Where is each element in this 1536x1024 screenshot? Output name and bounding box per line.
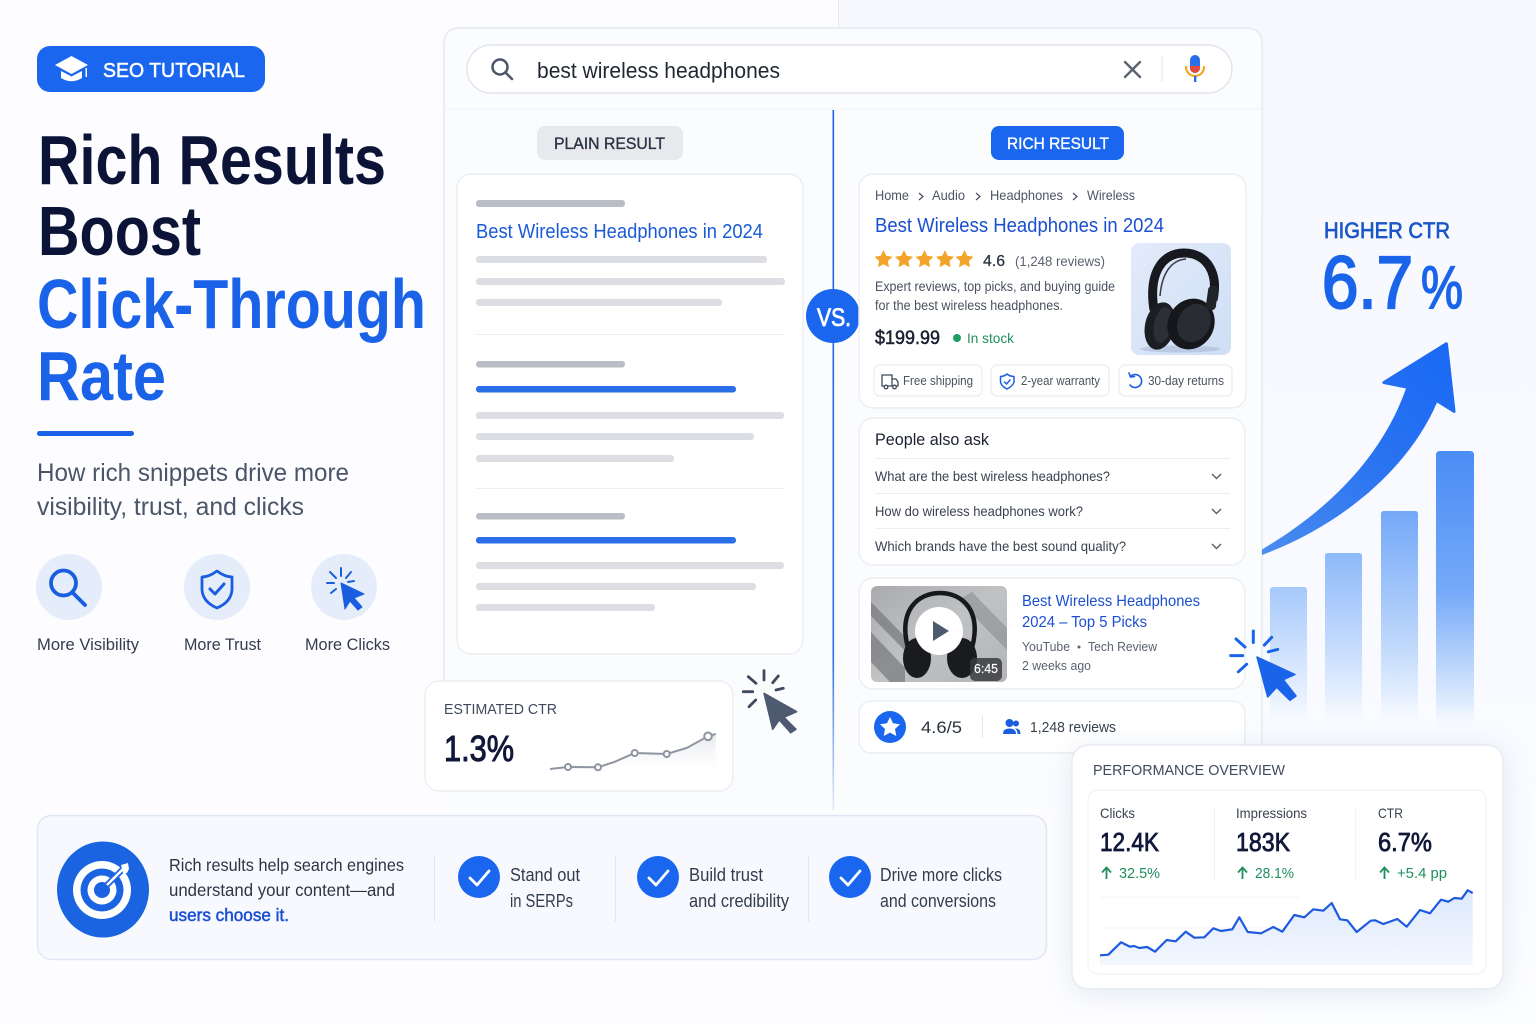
breadcrumb — [875, 187, 1135, 203]
breadcrumb: Audio — [932, 187, 965, 203]
icon: graduation cap — [55, 56, 88, 81]
metric: clicks: 32.5% — [1119, 865, 1160, 882]
metric: clicks: 12.4K — [1100, 827, 1160, 857]
check: stand out — [458, 856, 580, 911]
card: rating summary: 4.6/5 — [921, 718, 962, 737]
card: video result: Best Wireless Headphones — [1022, 593, 1200, 610]
takeaway text: understand your content—and — [169, 880, 395, 900]
metric: impressions: 28.1% — [1255, 865, 1294, 882]
card: video result: Tech Review — [1088, 639, 1158, 654]
icon: click cursor — [327, 568, 364, 610]
bar chart — [1270, 451, 1474, 730]
panel: performance overview — [1072, 745, 1503, 989]
card: estimated CTR: 1.3% — [444, 728, 514, 769]
title: Rate — [37, 337, 166, 415]
arrow: growth — [1262, 342, 1456, 555]
card: people also ask — [859, 418, 1245, 565]
metric: CTR: 6.7% — [1378, 827, 1432, 857]
card: rich product result — [859, 174, 1246, 408]
subtitle: visibility, trust, and clicks — [37, 493, 304, 521]
check: drive clicks — [829, 856, 1002, 911]
star rating — [874, 250, 974, 267]
benefit: more trust — [184, 554, 261, 654]
subtitle: How rich snippets drive more — [37, 459, 349, 487]
subtitle — [37, 459, 349, 521]
search bar — [467, 45, 1232, 93]
check: build trust — [637, 856, 789, 911]
description — [875, 279, 1115, 313]
higher CTR stat: 6.7 — [1322, 241, 1413, 324]
card: rating summary: 1,248 reviews — [1030, 719, 1116, 736]
metric: impressions: Impressions — [1236, 805, 1307, 821]
card: people also ask: People also ask — [875, 430, 989, 449]
benefit: more trust: More Trust — [184, 635, 261, 654]
chip: warranty — [991, 365, 1109, 396]
icon: microphone — [1186, 55, 1204, 82]
icon: people — [1003, 719, 1020, 734]
check: build trust: Build trust — [689, 865, 763, 885]
icon: clear — [1125, 62, 1140, 77]
icon: magnifier — [51, 570, 85, 605]
icon: target — [57, 842, 149, 938]
card: rich product result: 4.6 — [983, 253, 1005, 270]
title: Rich Results — [38, 121, 386, 199]
label: rich result: RICH RESULT — [1007, 134, 1109, 153]
breadcrumb: Wireless — [1087, 187, 1135, 203]
metric: impressions — [1236, 805, 1307, 882]
card: video result: 2 weeks ago — [1022, 658, 1091, 673]
badge: SEO tutorial: SEO TUTORIAL — [103, 59, 245, 82]
label: plain result: PLAIN RESULT — [554, 134, 665, 153]
VS badge — [806, 289, 860, 343]
metric: CTR: CTR — [1378, 805, 1403, 821]
video thumbnail — [871, 586, 1007, 682]
label: plain result — [537, 126, 683, 160]
higher CTR stat: HIGHER CTR — [1324, 218, 1450, 243]
line chart — [1100, 890, 1473, 965]
icon: shield check — [202, 571, 232, 608]
panel: plain search result: Best Wireless Headphones in 2024 — [476, 221, 763, 243]
divider: comparison line — [832, 110, 834, 810]
takeaway text — [169, 855, 404, 925]
benefit: more clicks: More Clicks — [305, 635, 390, 654]
metric: CTR — [1378, 805, 1447, 882]
takeaway text: Rich results help search engines — [169, 855, 404, 875]
takeaway text: users choose it. — [169, 905, 289, 925]
card: rich product result: (1,248 reviews) — [1015, 253, 1105, 269]
VS badge: VS. — [817, 304, 851, 332]
product image: headphones — [1131, 243, 1231, 358]
check: drive clicks: Drive more clicks — [880, 865, 1002, 885]
icon: blue click cursor — [1231, 631, 1296, 700]
panel: performance overview: PERFORMANCE OVERVIEW — [1093, 763, 1285, 779]
icon: gray click cursor — [743, 671, 797, 733]
metric: clicks: Clicks — [1100, 805, 1135, 821]
card: video result: 2024 – Top 5 Picks — [1022, 614, 1147, 631]
card: people also ask: Which brands have the best sound quality? — [875, 538, 1126, 554]
higher CTR stat: % — [1421, 254, 1463, 321]
badge: SEO tutorial — [37, 46, 265, 92]
check: drive clicks: and conversions — [880, 891, 996, 911]
description: for the best wireless headphones. — [875, 298, 1063, 313]
search bar: best wireless headphones — [537, 58, 780, 83]
check: stand out: in SERPs — [510, 891, 573, 911]
title: Click-Through — [37, 265, 426, 343]
check: build trust: and credibility — [689, 891, 789, 911]
card: people also ask: How do wireless headphones work? — [875, 503, 1083, 519]
card: people also ask: What are the best wireless headphones? — [875, 468, 1110, 484]
sparkline — [550, 732, 716, 778]
panel: key takeaways — [38, 816, 1046, 960]
card: video result: YouTube — [1022, 639, 1070, 654]
benefit: more clicks — [305, 554, 390, 654]
title: Boost — [38, 192, 201, 270]
card: rich product result: Best Wireless Headphones in 2024 — [875, 214, 1164, 237]
metric: CTR: +5.4 pp — [1397, 865, 1447, 882]
card: rich product result: $199.99 — [875, 328, 940, 349]
chip: returns: 30-day returns — [1148, 374, 1224, 388]
panel: browser window — [444, 28, 1262, 810]
chip: free shipping: Free shipping — [903, 374, 973, 388]
card: video result — [859, 578, 1245, 689]
benefit: more visibility: More Visibility — [37, 635, 139, 654]
card: estimated CTR — [425, 681, 733, 791]
card: rich product result: In stock — [967, 330, 1015, 346]
metric: impressions: 183K — [1236, 827, 1291, 857]
higher CTR stat — [1322, 218, 1463, 324]
panel: plain search result — [457, 174, 803, 654]
chip: free shipping — [874, 365, 982, 396]
video thumbnail: 6:45 — [974, 661, 998, 676]
metric: clicks — [1100, 805, 1160, 882]
card: rating summary — [859, 701, 1245, 753]
chip: warranty: 2-year warranty — [1021, 374, 1101, 388]
chip: returns — [1119, 365, 1232, 396]
breadcrumb: Home — [875, 187, 909, 203]
label: rich result — [991, 126, 1124, 160]
icon: search — [492, 60, 512, 79]
card: estimated CTR: ESTIMATED CTR — [444, 702, 557, 718]
breadcrumb: Headphones — [990, 187, 1063, 203]
benefit: more visibility — [36, 554, 139, 654]
check: stand out: Stand out — [510, 865, 580, 885]
title — [37, 121, 426, 415]
description: Expert reviews, top picks, and buying guide — [875, 279, 1115, 294]
